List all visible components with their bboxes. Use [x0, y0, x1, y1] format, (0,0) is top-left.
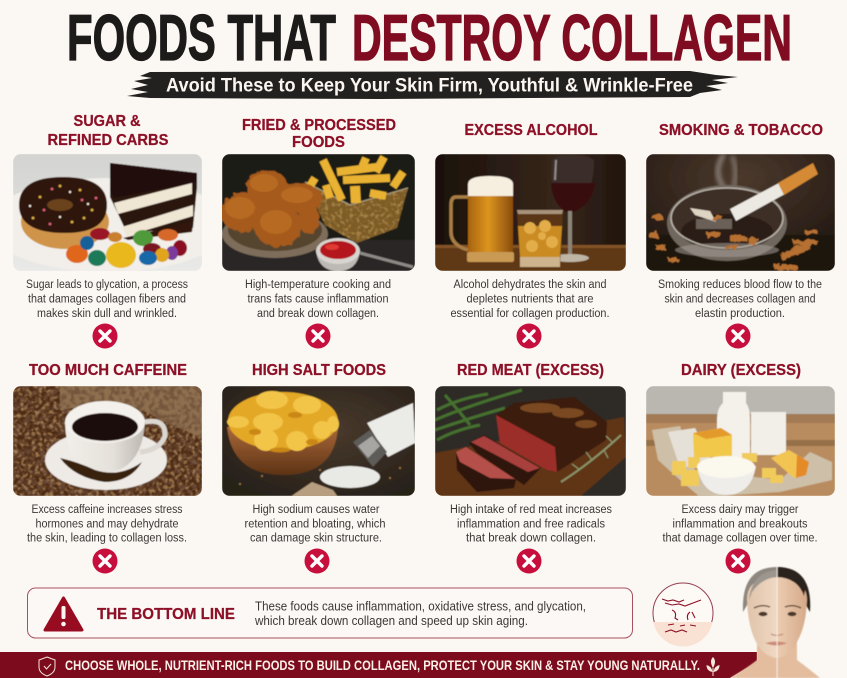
description: trans fats cause inflammation [248, 294, 388, 306]
photo: milk and cheese [646, 386, 835, 497]
photo: sliced roast on board [435, 386, 626, 496]
description [244, 504, 386, 544]
callout: the bottom line [28, 588, 632, 638]
description: retention and bloating, which [244, 518, 386, 530]
heading: HIGH SALT FOODS [252, 362, 386, 379]
panel: red meat [435, 362, 626, 574]
description [450, 504, 612, 544]
heading: RED MEAT (EXCESS) [457, 362, 604, 379]
description: hormones and may dehydrate [36, 518, 178, 530]
callout text: These foods cause inflammation, oxidative stress, and glycation, [255, 598, 586, 614]
photo: donut, cake and candy [13, 154, 202, 271]
description: High-temperature cooking and [245, 279, 391, 291]
description: Excess caffeine increases stress [32, 504, 183, 516]
description: Smoking reduces blood flow to the [658, 279, 822, 291]
icon: leaf sprig [706, 657, 720, 676]
icon: shield [39, 657, 55, 676]
panel: high salt foods [222, 362, 415, 574]
title [67, 1, 792, 74]
photo: cigarette in ashtray [646, 154, 835, 271]
portrait: half-and-half face [730, 567, 820, 678]
description: and break down collagen. [257, 308, 379, 320]
description: that damages collagen fibers and [28, 294, 186, 306]
icon: red x [516, 548, 542, 574]
description: depletes nutrients that are [466, 294, 594, 306]
heading: TOO MUCH CAFFEINE [29, 362, 187, 379]
description: skin and decreases collagen and [664, 294, 816, 306]
description [658, 279, 822, 320]
heading: FRIED & PROCESSED [242, 117, 396, 134]
description: elastin production. [695, 308, 785, 320]
panel: sugar and refined carbs [13, 114, 202, 348]
heading: SMOKING & TOBACCO [659, 122, 823, 139]
description [26, 279, 188, 320]
icon: red x [516, 324, 542, 348]
description [27, 504, 187, 544]
subtitle brush banner: Avoid These to Keep Your Skin Firm, Youthful & Wrinkle-Free [166, 76, 693, 96]
icon: damaged skin diagram [653, 583, 713, 647]
heading [242, 117, 396, 151]
description: essential for collagen production. [450, 308, 610, 320]
description: Excess dairy may trigger [682, 504, 799, 516]
icon: red x [92, 548, 118, 574]
subtitle brush banner [127, 71, 738, 99]
panel: dairy [646, 362, 835, 574]
description: Sugar leads to glycation, a process [26, 279, 188, 291]
callout text [254, 598, 586, 628]
description: Alcohol dehydrates the skin and [454, 279, 606, 291]
photo: beer, whisky and wine [435, 154, 626, 271]
panel: fried and processed foods [220, 117, 415, 348]
icon: warning triangle [45, 598, 82, 630]
heading: DAIRY (EXCESS) [681, 362, 801, 379]
description: makes skin dull and wrinkled. [37, 308, 177, 320]
icon: red x [726, 324, 750, 348]
description [450, 279, 610, 320]
description: High intake of red meat increases [450, 504, 612, 516]
description: that damage collagen over time. [662, 532, 818, 544]
description: that break down collagen. [466, 532, 596, 544]
description [662, 504, 818, 544]
callout heading: THE BOTTOM LINE [97, 606, 235, 623]
description: inflammation and breakouts [672, 518, 808, 530]
description: can damage skin structure. [250, 532, 382, 544]
photo: coffee cup and beans [13, 386, 202, 496]
heading [48, 113, 168, 149]
photo: fried chicken and fries [220, 154, 415, 271]
callout text: which break down collagen and speed up skin aging. [254, 613, 528, 628]
heading: EXCESS ALCOHOL [464, 122, 598, 139]
heading: SUGAR & [74, 113, 140, 130]
description: inflammation and free radicals [457, 518, 605, 530]
footer text: CHOOSE WHOLE, NUTRIENT-RICH FOODS TO BUILD COLLAGEN, PROTECT YOUR SKIN & STAY YOUNG NATURALLY. [65, 658, 700, 673]
panel: smoking and tobacco [646, 122, 835, 348]
panel: excess alcohol [435, 122, 626, 348]
icon: red x [306, 324, 330, 348]
heading: REFINED CARBS [48, 132, 168, 149]
panel: too much caffeine [13, 362, 202, 574]
description [245, 279, 391, 320]
footer band [0, 652, 757, 678]
heading: FOODS [292, 134, 345, 151]
description: High sodium causes water [252, 504, 380, 516]
icon: red x [726, 548, 750, 574]
icon: red x [304, 548, 330, 574]
photo: chips and salt shaker [222, 386, 415, 497]
description: the skin, leading to collagen loss. [27, 532, 187, 544]
icon: red x [92, 324, 118, 348]
title: FOODS THAT [67, 1, 336, 74]
